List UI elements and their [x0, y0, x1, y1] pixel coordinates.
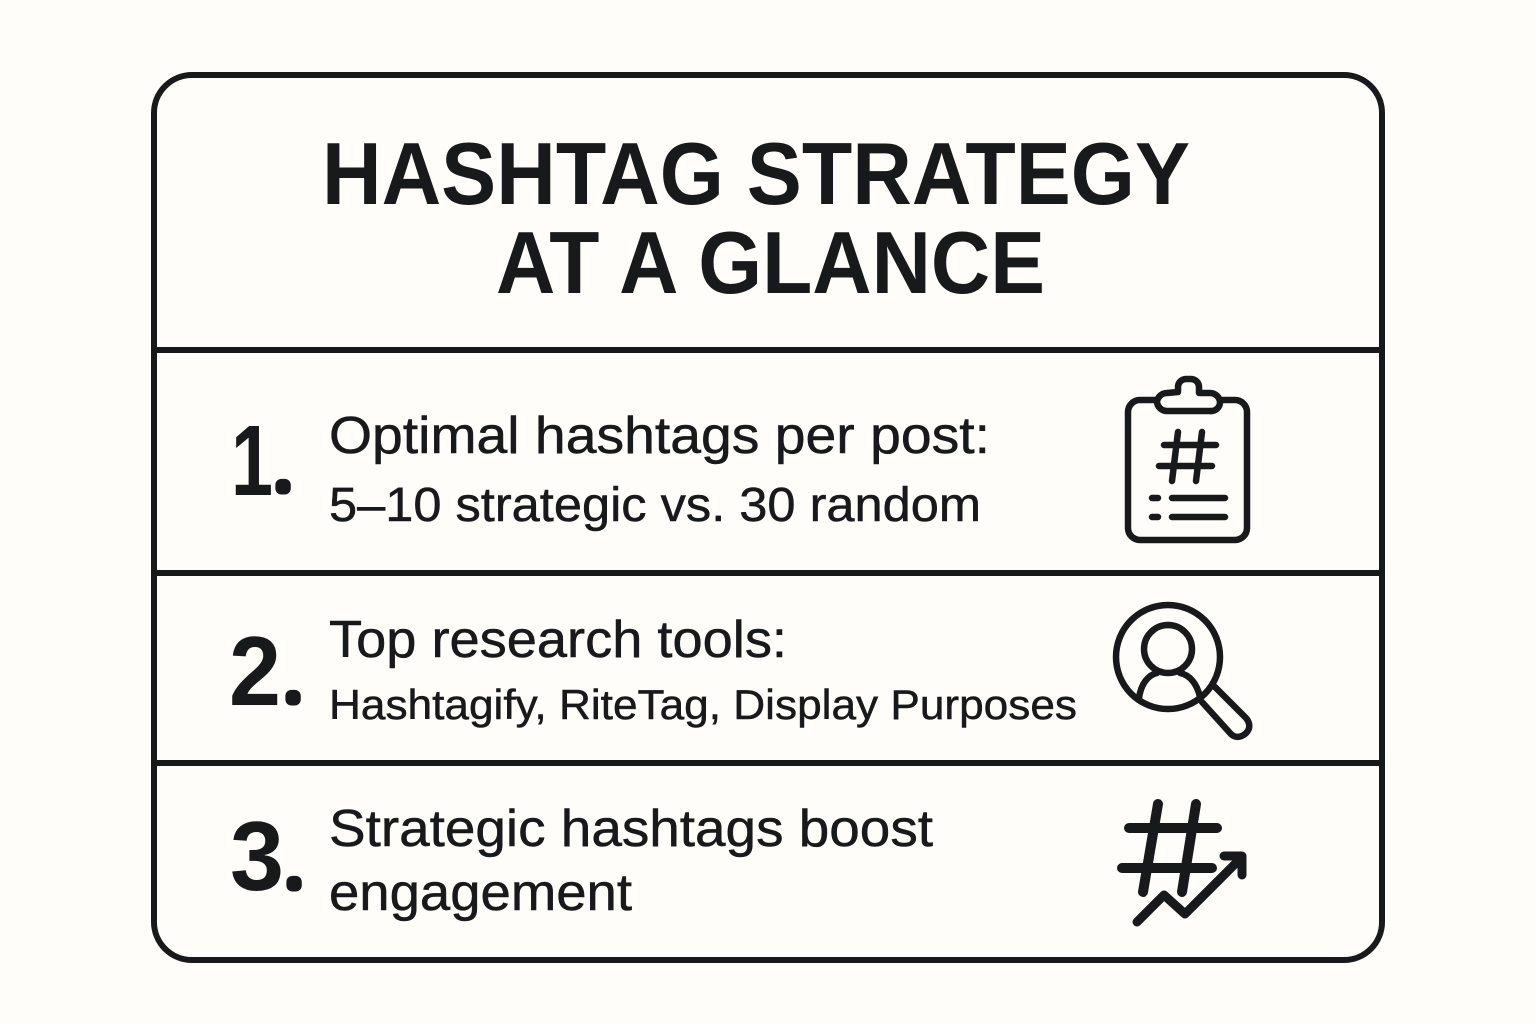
number 1: .: [280, 468, 286, 495]
text block: optimal hashtags per post: 5–10 strategic vs. 30 random: [329, 479, 981, 532]
text block: strategic hashtags boost engagement: [329, 800, 934, 922]
number 2: 2: [229, 616, 281, 726]
text block: top research tools: Hashtagify, RiteTag, Display Purposes: [329, 681, 1077, 728]
text block: top research tools: Top research tools:: [329, 611, 787, 669]
row 2: research tools: [229, 605, 1249, 737]
icon: clipboard with hash: [1128, 379, 1247, 540]
row 3: strategic hashtags boost engagement: [230, 800, 1242, 922]
number 3: 3: [230, 801, 284, 911]
title: [322, 124, 1190, 312]
title: AT A GLANCE: [496, 213, 1045, 312]
text block: optimal hashtags per post: [329, 407, 990, 532]
panel: main card: [154, 75, 1382, 960]
text block: optimal hashtags per post: Optimal hashtags per post:: [329, 407, 990, 465]
icon: magnifier with person: [1116, 605, 1249, 737]
text block: top research tools: [329, 611, 1077, 728]
icon: hash with rising arrow: [1122, 804, 1242, 922]
text block: strategic hashtags boost engagement: engagement: [329, 864, 633, 922]
text block: strategic hashtags boost engagement: Strategic hashtags boost: [329, 800, 934, 858]
number 2: .: [290, 679, 296, 706]
title: HASHTAG STRATEGY: [322, 124, 1190, 223]
row 1: optimal hashtags: [231, 379, 1247, 540]
number 3: .: [291, 865, 297, 892]
number 1: 1: [231, 405, 273, 517]
